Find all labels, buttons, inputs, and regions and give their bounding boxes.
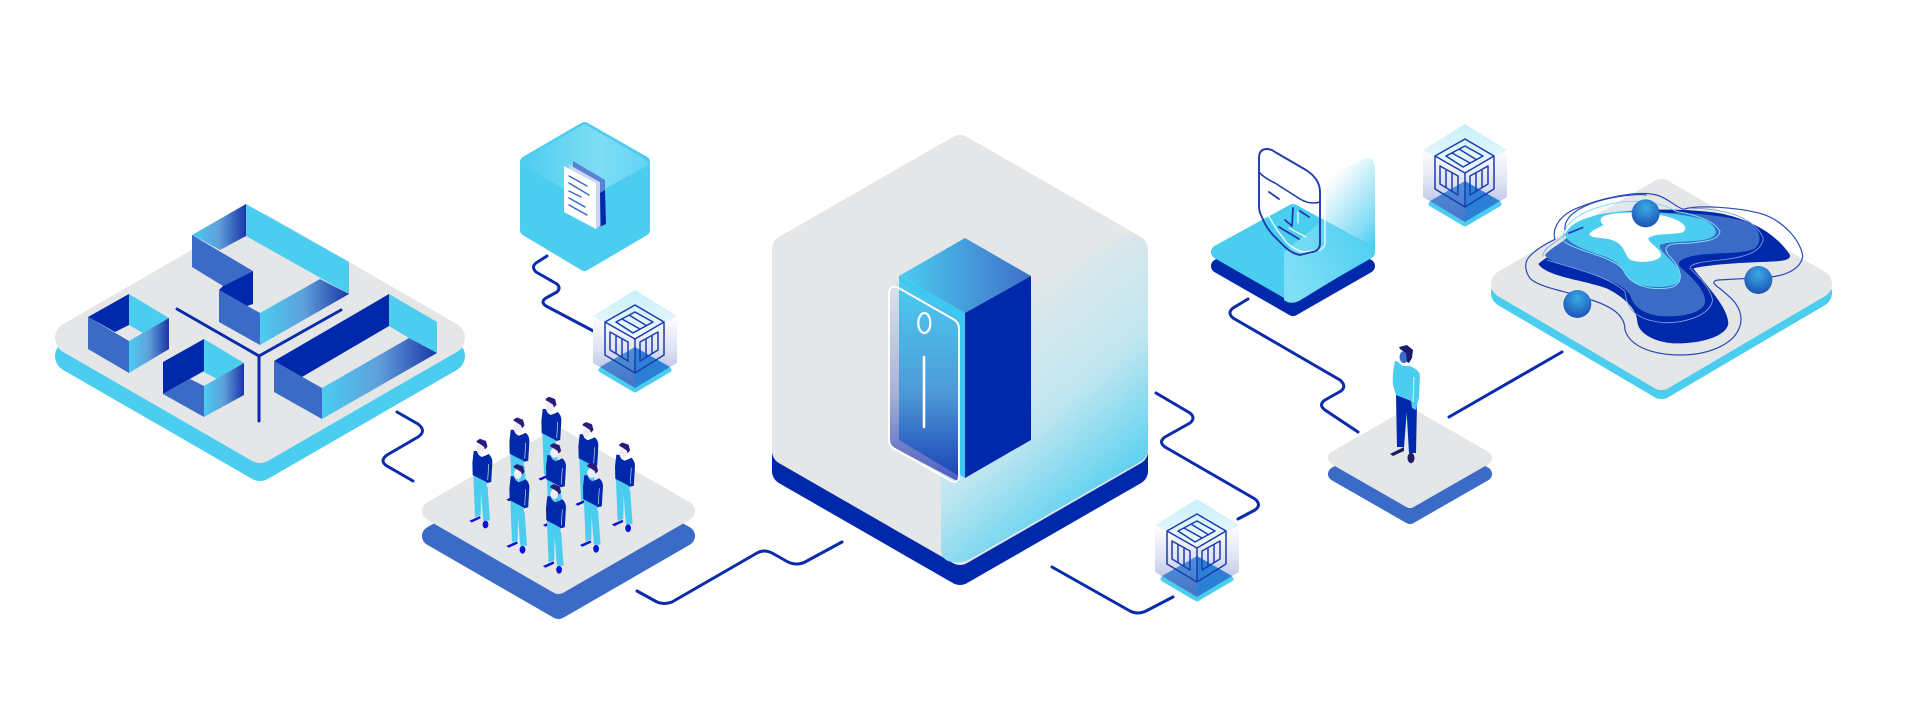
platform top bbox=[71, 229, 449, 447]
arrow: connector from maze platform to team bbox=[383, 412, 422, 481]
icon: container cube top right bbox=[1423, 124, 1507, 224]
platform base bbox=[1505, 202, 1818, 385]
maze block: small square centre bbox=[163, 339, 244, 417]
platform top bbox=[1218, 211, 1368, 295]
platform base bbox=[432, 463, 685, 609]
arrow: connector from standing person to map platform bbox=[1449, 352, 1562, 417]
panel: central cube bbox=[786, 149, 1148, 571]
server tower bbox=[889, 238, 1031, 482]
glass front face bbox=[1284, 220, 1374, 303]
maze divider lines bbox=[177, 309, 341, 421]
panel: terrain map platform bbox=[1505, 193, 1818, 385]
standing person bbox=[1390, 345, 1420, 463]
contour: cyan bbox=[1565, 211, 1716, 287]
maze block: long wall right bbox=[274, 294, 437, 419]
contour: mid blue bbox=[1545, 213, 1760, 316]
platform top bbox=[1335, 415, 1485, 501]
team of nine people bbox=[469, 397, 635, 574]
platform top bbox=[1505, 193, 1818, 376]
icon: shield outline bbox=[1259, 149, 1325, 255]
sphere top bbox=[1632, 199, 1660, 227]
platform base bbox=[1218, 225, 1368, 309]
icon: container cube left bbox=[593, 290, 677, 390]
cube body bbox=[786, 149, 1134, 551]
platform base bbox=[1335, 431, 1485, 517]
arrow: connector from central cube to lower container bbox=[1052, 567, 1173, 613]
contour: white peak bbox=[1589, 213, 1685, 262]
panel: shield platform bbox=[1218, 149, 1375, 309]
contour: deep navy bbox=[1538, 210, 1790, 343]
arrow: connector from document to container bbox=[534, 256, 599, 334]
door handle bbox=[923, 357, 925, 427]
sphere left bbox=[1563, 290, 1591, 318]
glass back panel bbox=[1323, 158, 1375, 252]
cube glass right side bbox=[941, 233, 1148, 562]
icon: document stack bbox=[564, 161, 606, 229]
panel: left maze platform bbox=[71, 204, 449, 465]
hexagon top face bbox=[520, 124, 650, 200]
panel: team platform bbox=[432, 397, 685, 609]
panel: standing person platform bbox=[1335, 345, 1485, 517]
maze block: large folded wall bbox=[192, 204, 349, 345]
cube base bbox=[786, 169, 1134, 571]
hexagon body bbox=[526, 128, 644, 265]
arrow: connector from shield to standing person bbox=[1230, 299, 1358, 432]
terrain contour map bbox=[1526, 194, 1803, 355]
platform top bbox=[432, 438, 685, 584]
icon: container cube bottom bbox=[1155, 499, 1239, 599]
sphere right bbox=[1744, 266, 1772, 294]
maze block: small square left bbox=[88, 294, 169, 373]
door indicator ring bbox=[918, 313, 930, 333]
contour lines bbox=[1526, 194, 1803, 355]
server door outline bbox=[889, 287, 959, 482]
arrow: connector from central cube to container bbox=[1156, 393, 1258, 519]
arrow: connector from team to central cube bbox=[637, 542, 842, 604]
panel: document hexagon bbox=[520, 124, 650, 265]
platform base bbox=[71, 247, 449, 465]
